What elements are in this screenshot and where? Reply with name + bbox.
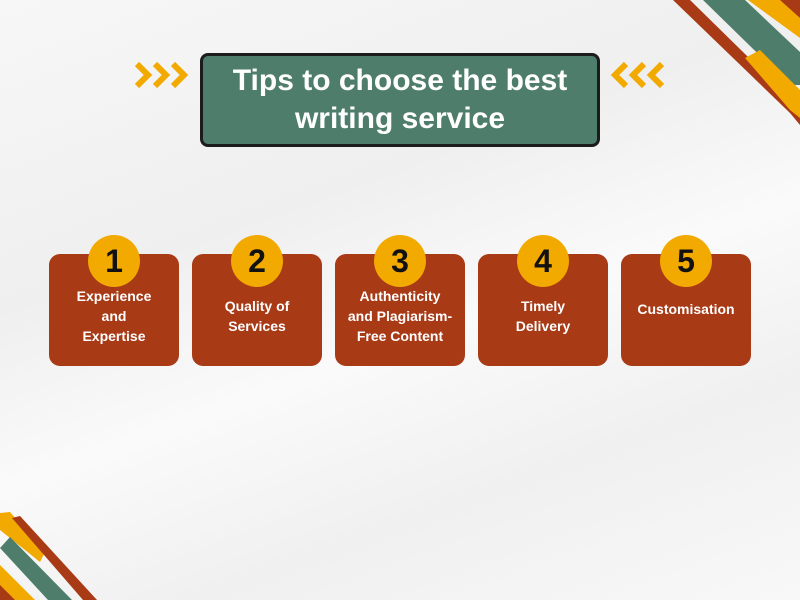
badge 5 bbox=[660, 235, 712, 287]
card 3 bbox=[335, 254, 465, 366]
card 4: Delivery bbox=[516, 318, 570, 334]
title bbox=[200, 53, 600, 147]
badge 1: 1 bbox=[105, 243, 123, 279]
badge 5: 5 bbox=[677, 243, 695, 279]
card 3: Authenticity bbox=[360, 288, 440, 304]
card 1: and bbox=[102, 308, 126, 324]
card 1 bbox=[49, 254, 179, 366]
card 2 bbox=[192, 254, 322, 366]
decoration: bottom-left stripes bbox=[0, 512, 45, 562]
title: writing service bbox=[295, 102, 505, 135]
card 5 bbox=[621, 254, 751, 366]
card 1: Expertise bbox=[82, 328, 146, 344]
badge 4: 4 bbox=[534, 243, 552, 279]
card 4 bbox=[478, 254, 608, 366]
title: Tips to choose the best bbox=[233, 64, 567, 97]
card 3: Free Content bbox=[357, 328, 443, 344]
card 3: and Plagiarism- bbox=[348, 308, 452, 324]
badge 3: 3 bbox=[391, 243, 409, 279]
card 4: Timely bbox=[521, 298, 565, 314]
card 1: Experience bbox=[77, 288, 151, 304]
badge 2 bbox=[231, 235, 283, 287]
badge 3 bbox=[374, 235, 426, 287]
card 2: Quality of bbox=[225, 298, 289, 314]
icon: left chevrons bbox=[134, 62, 188, 88]
badge 2: 2 bbox=[248, 243, 266, 279]
badge 1 bbox=[88, 235, 140, 287]
icon: right chevrons bbox=[610, 62, 664, 88]
badge 4 bbox=[517, 235, 569, 287]
card 2: Services bbox=[228, 318, 286, 334]
card 5: Customisation bbox=[637, 301, 735, 317]
